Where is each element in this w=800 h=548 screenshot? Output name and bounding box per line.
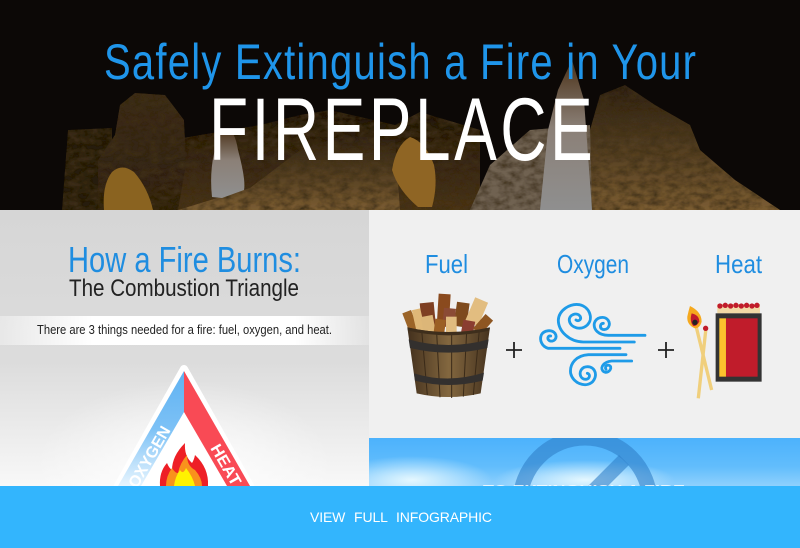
white text band xyxy=(0,316,369,345)
subheading: combustion triangle: The Combustion Triangle xyxy=(69,275,299,302)
icon: bucket of logs xyxy=(407,294,490,398)
oxygen side: OXYGEN xyxy=(126,424,174,491)
oxygen side xyxy=(118,371,184,491)
fireplace logs xyxy=(62,85,780,210)
cropped caption: TO EXTINGUISH A FIRE xyxy=(483,482,685,499)
intro sentence: There are 3 things needed for a fire: fuel, oxygen, and heat. xyxy=(37,323,332,337)
panel: extinguishing teaser xyxy=(369,438,800,486)
heat side: HEAT xyxy=(207,442,244,489)
panel: fire ingredients xyxy=(369,210,800,438)
label: fuel: Fuel xyxy=(425,249,468,279)
pale burnt log xyxy=(470,125,592,210)
heading line: fireplace: FIREPLACE xyxy=(209,81,593,180)
heat side xyxy=(184,371,250,489)
flame glow left xyxy=(211,129,244,198)
panel: hero header xyxy=(0,0,800,210)
panel: how a fire burns xyxy=(0,210,369,486)
icon: wind xyxy=(541,304,645,385)
call to action bar xyxy=(0,486,800,548)
plus sign 2 xyxy=(658,342,674,358)
flame glow right xyxy=(540,60,592,210)
icon: matches and matchbox xyxy=(687,303,762,398)
log cut faces xyxy=(104,137,436,210)
heading line: safely extinguish: Safely Extinguish a Fire in Your xyxy=(104,34,696,90)
combustion triangle xyxy=(116,365,252,486)
heading: how a fire burns: How a Fire Burns: xyxy=(68,239,301,280)
button label: VIEW FULL INFOGRAPHIC xyxy=(310,509,492,525)
label: oxygen: Oxygen xyxy=(557,249,629,279)
plus sign 1 xyxy=(506,342,522,358)
icon: flame xyxy=(160,443,208,486)
icon: prohibition sign xyxy=(514,438,656,486)
label: heat: Heat xyxy=(715,249,763,279)
